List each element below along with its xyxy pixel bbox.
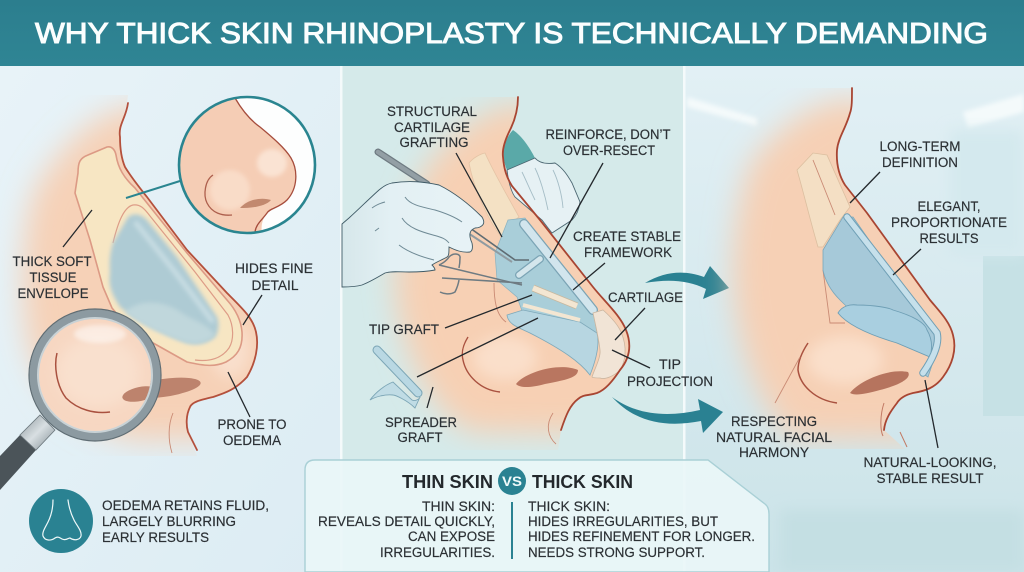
- arrow: upper: [645, 266, 729, 299]
- text: thin skin column: [318, 499, 495, 560]
- soft tissue envelope: [75, 147, 242, 365]
- label: tip projection: TIP: [659, 357, 681, 372]
- label: long-term definition: LONG-TERM: [880, 139, 960, 154]
- nose outline right: [837, 88, 954, 430]
- label: spreader graft: SPREADER: [385, 415, 457, 430]
- oedema fluid area: [109, 214, 218, 344]
- leader lines middle: [417, 153, 650, 408]
- text: thin skin column: REVEALS DETAIL QUICKLY,: [318, 514, 495, 529]
- inset: nose close-up: [178, 96, 316, 234]
- text: thick skin column: [528, 499, 755, 560]
- label: natural-looking, stable result: NATURAL-LOOKING,: [864, 455, 996, 470]
- text: oedema note: EARLY RESULTS: [102, 530, 209, 545]
- glove finger shadows: [372, 197, 462, 260]
- label: thick soft tissue envelope: [12, 254, 92, 301]
- text: oedema note: OEDEMA RETAINS FLUID,: [102, 498, 269, 513]
- comparison heading: [402, 467, 633, 495]
- arrow: lower: [612, 397, 723, 433]
- panel: surgical technique: [342, 97, 713, 445]
- label: tip projection: PROJECTION: [627, 374, 713, 389]
- label: natural-looking, stable result: STABLE RESULT: [876, 471, 984, 486]
- panel: right background: [684, 66, 1024, 572]
- label: reinforce, don't over-resect: [546, 127, 670, 158]
- label: tip projection: [627, 357, 713, 389]
- title banner: [0, 0, 1024, 66]
- label: respecting natural facial harmony: NATURAL FACIAL: [716, 430, 832, 445]
- label: thick soft tissue envelope: THICK SOFT: [12, 254, 92, 269]
- label: structural cartilage grafting: CARTILAGE: [394, 120, 470, 135]
- label: spreader graft: GRAFT: [398, 430, 442, 445]
- label: create stable framework: CREATE STABLE: [573, 229, 681, 244]
- text: thick skin column: THICK SKIN:: [528, 499, 610, 514]
- label: thick soft tissue envelope: TISSUE: [30, 270, 77, 285]
- label: hides fine detail: [235, 261, 313, 293]
- title banner: WHY THICK SKIN RHINOPLASTY IS TECHNICALLY DEMANDING: [35, 18, 988, 50]
- text: thick skin column: NEEDS STRONG SUPPORT.: [528, 545, 705, 560]
- label: elegant, proportionate results: PROPORTIONATE: [891, 215, 1007, 230]
- label: respecting natural facial harmony: [716, 414, 832, 460]
- label: elegant, proportionate results: [891, 199, 1007, 246]
- text: thick skin column: HIDES IRREGULARITIES, BUT: [528, 514, 718, 529]
- inner envelope line: [113, 205, 233, 360]
- cartilage upper middle: [469, 153, 519, 238]
- label: create stable framework: FRAMEWORK: [584, 245, 672, 260]
- label: hides fine detail: DETAIL: [252, 278, 298, 293]
- leader lines left: [63, 181, 262, 417]
- label: structural cartilage grafting: STRUCTURAL: [387, 104, 477, 119]
- label: thick soft tissue envelope: ENVELOPE: [18, 286, 89, 301]
- nose outline middle: [503, 97, 629, 430]
- magnifying glass: [0, 309, 161, 490]
- nose skin right: [733, 99, 990, 440]
- panel: thick skin anatomy: [0, 80, 315, 490]
- label: structural cartilage grafting: [387, 104, 477, 150]
- label: natural-looking, stable result: [864, 455, 996, 486]
- label: elegant, proportionate results: RESULTS: [920, 231, 979, 246]
- nose skin left: [23, 105, 300, 440]
- lower-face contour middle: [548, 413, 556, 444]
- leader lines right: [850, 172, 938, 448]
- text: thin skin column: THIN SKIN:: [422, 499, 495, 514]
- panel: middle background: [341, 66, 684, 572]
- label: spreader graft: [385, 415, 457, 445]
- label: reinforce, don't over-resect: REINFORCE, DON’T: [546, 127, 670, 142]
- label: long-term definition: [880, 139, 960, 170]
- label: respecting natural facial harmony: HARMONY: [739, 445, 809, 460]
- nostril left: [124, 374, 202, 402]
- icon: nose badge: [29, 489, 93, 553]
- label: respecting natural facial harmony: RESPECTING: [731, 414, 817, 429]
- nose outline left: [120, 103, 257, 450]
- framework right: [823, 217, 938, 377]
- label: hides fine detail: HIDES FINE: [235, 261, 313, 276]
- comparison heading: THIN SKIN: [402, 472, 493, 492]
- text: oedema note: [102, 498, 269, 545]
- panel: left background: [0, 66, 341, 572]
- text: thick skin column: HIDES REFINEMENT FOR LONGER.: [528, 529, 755, 544]
- label: create stable framework: [573, 229, 681, 260]
- surgeon right glove: [503, 130, 580, 233]
- blue framework middle: [494, 218, 598, 375]
- scissors: [439, 254, 522, 294]
- text: thin skin column: IRREGULARITIES.: [380, 545, 495, 560]
- label: long-term definition: DEFINITION: [882, 155, 958, 170]
- cartilage right: [797, 153, 850, 247]
- comparison heading: VS: [502, 473, 522, 489]
- label: reinforce, don't over-resect: OVER-RESECT: [563, 143, 655, 158]
- text: oedema note: LARGELY BLURRING: [102, 514, 236, 529]
- graft outline right: [813, 160, 845, 323]
- label: elegant, proportionate results: ELEGANT,: [918, 199, 980, 214]
- nose skin middle: [395, 104, 650, 435]
- label: prone to oedema: PRONE TO: [218, 417, 286, 432]
- ala and nostril right: [775, 343, 909, 447]
- panel: thin vs thick skin comparison: [305, 460, 769, 572]
- tip cartilage: [592, 310, 625, 379]
- label: prone to oedema: [218, 417, 286, 448]
- label: structural cartilage grafting: GRAFTING: [400, 135, 468, 150]
- spreader graft shape: [370, 350, 420, 408]
- label: tip graft: TIP GRAFT: [369, 322, 439, 337]
- panel dividers: [340, 66, 686, 572]
- philtrum lines left: [169, 413, 173, 453]
- comparison heading: THICK SKIN: [532, 472, 633, 492]
- panel: final result: [716, 88, 1007, 486]
- surgeon left glove: [342, 182, 484, 287]
- label: prone to oedema: OEDEMA: [223, 433, 281, 448]
- ala and nostril middle: [462, 337, 578, 392]
- label: cartilage: CARTILAGE: [608, 290, 683, 305]
- text: thin skin column: CAN EXPOSE: [408, 529, 495, 544]
- forceps: [378, 152, 529, 262]
